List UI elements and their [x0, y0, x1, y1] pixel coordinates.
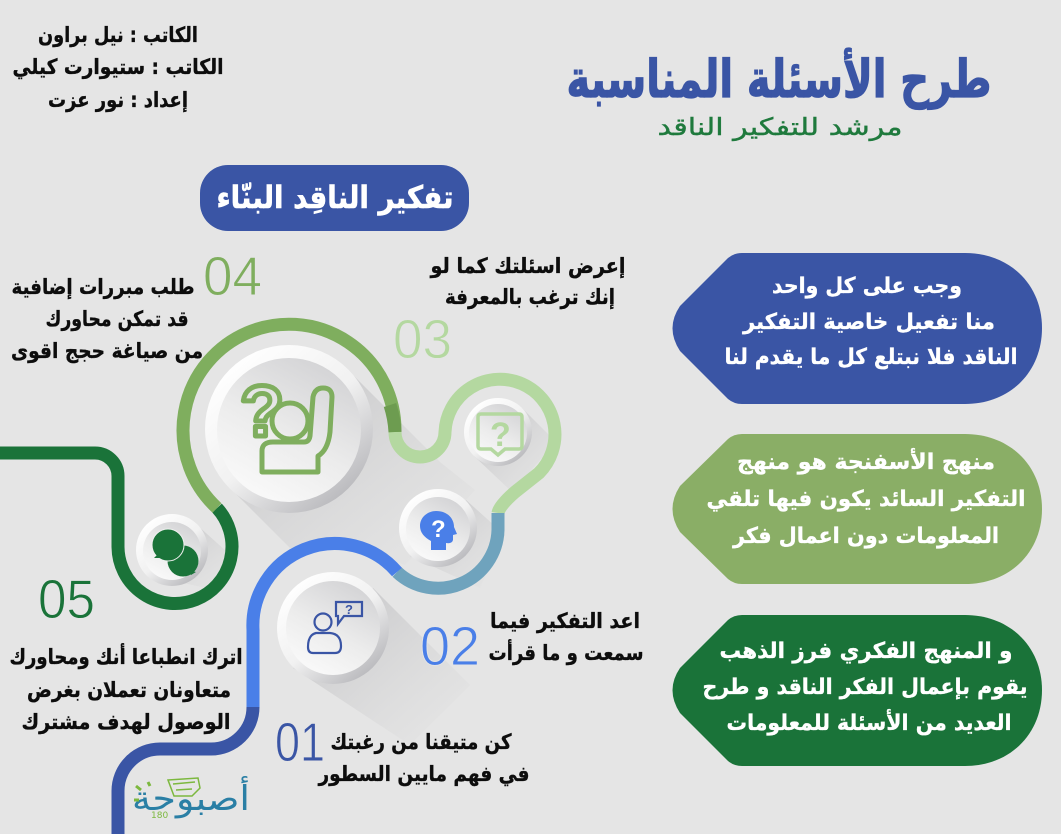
section heading pill — [200, 165, 469, 231]
callout: light green: المعلومات دون اعمال فكر — [732, 524, 999, 549]
step 03: إعرض اسئلتك كما لو — [430, 254, 626, 278]
long cast shadows — [147, 370, 556, 745]
authors credits: الكاتب : ستيوارت كيلي — [12, 55, 224, 79]
icon circle: speech book question — [464, 398, 532, 466]
step 04: قد تمكن محاورك — [46, 307, 188, 331]
step 04: من صياغة حجج اقوى — [11, 339, 203, 363]
step 01: كن متيقنا من رغبتك — [330, 730, 512, 754]
step 04: طلب مبررات إضافية — [12, 275, 194, 299]
callout: light green — [672, 434, 1042, 584]
authors credits: الكاتب : نيل براون — [38, 23, 198, 47]
callout: dark green: العديد من الأسئلة للمعلومات — [726, 708, 1012, 736]
icon circle: head with question mark: ? — [431, 516, 446, 543]
step 03: إنك ترغب بالمعرفة — [445, 285, 615, 309]
step 01: 01 — [275, 711, 325, 773]
step 01 — [275, 711, 530, 786]
callout: dark green: يقوم بإعمال الفكر الناقد و طرح — [702, 675, 1028, 700]
step 01: في فهم مايين السطور — [318, 762, 530, 786]
icon circle: large question person — [205, 345, 373, 513]
step 05: الوصول لهدف مشترك — [22, 710, 230, 734]
step 02: 02 — [420, 615, 480, 677]
callout: blue: منا تفعيل خاصية التفكير — [742, 310, 995, 335]
icon circle: speech book question: ? — [490, 416, 511, 454]
callout: dark green: و المنهج الفكري فرز الذهب — [720, 639, 1012, 664]
callout: dark green — [672, 615, 1042, 766]
icon circle: person asking — [277, 572, 389, 684]
step 03 — [393, 254, 626, 370]
callout: light green: منهج الأسفنجة هو منهج — [737, 447, 995, 475]
step 02: اعد التفكير فيما — [490, 609, 640, 633]
authors credits: إعداد : نور عزت — [48, 88, 188, 112]
step 02 — [420, 609, 644, 677]
callout: blue: الناقد فلا نبتلع كل ما يقدم لنا — [724, 345, 1018, 370]
step 04 — [11, 245, 262, 363]
subtitle: مرشد للتفكير الناقد — [658, 113, 902, 141]
icon circle: person asking: ? — [345, 602, 353, 617]
callout: light green: التفكير السائد يكون فيها تلقي — [706, 487, 1026, 512]
section heading pill: تفكير الناقِد البنّاء — [216, 180, 454, 216]
step 05: 05 — [38, 568, 95, 630]
step 05 — [10, 568, 242, 734]
logo: أصبوحة — [132, 776, 250, 819]
step 04: 04 — [203, 245, 262, 307]
process track — [0, 324, 555, 834]
icon circle: head with question mark — [399, 489, 477, 567]
step 05: اترك انطباعا أنك ومحاورك — [10, 642, 242, 669]
callout: blue — [672, 253, 1042, 404]
step 02: سمعت و ما قرأت — [488, 638, 644, 665]
icon circle: large question person: ? — [240, 372, 284, 452]
authors credits — [12, 23, 224, 112]
logo: 180 — [151, 811, 168, 821]
callout: blue: وجب على كل واحد — [772, 274, 962, 299]
icon circle: chat bubbles — [136, 514, 208, 586]
step 03: 03 — [393, 308, 452, 370]
step 05: متعاونان تعملان بغرض — [27, 678, 231, 702]
